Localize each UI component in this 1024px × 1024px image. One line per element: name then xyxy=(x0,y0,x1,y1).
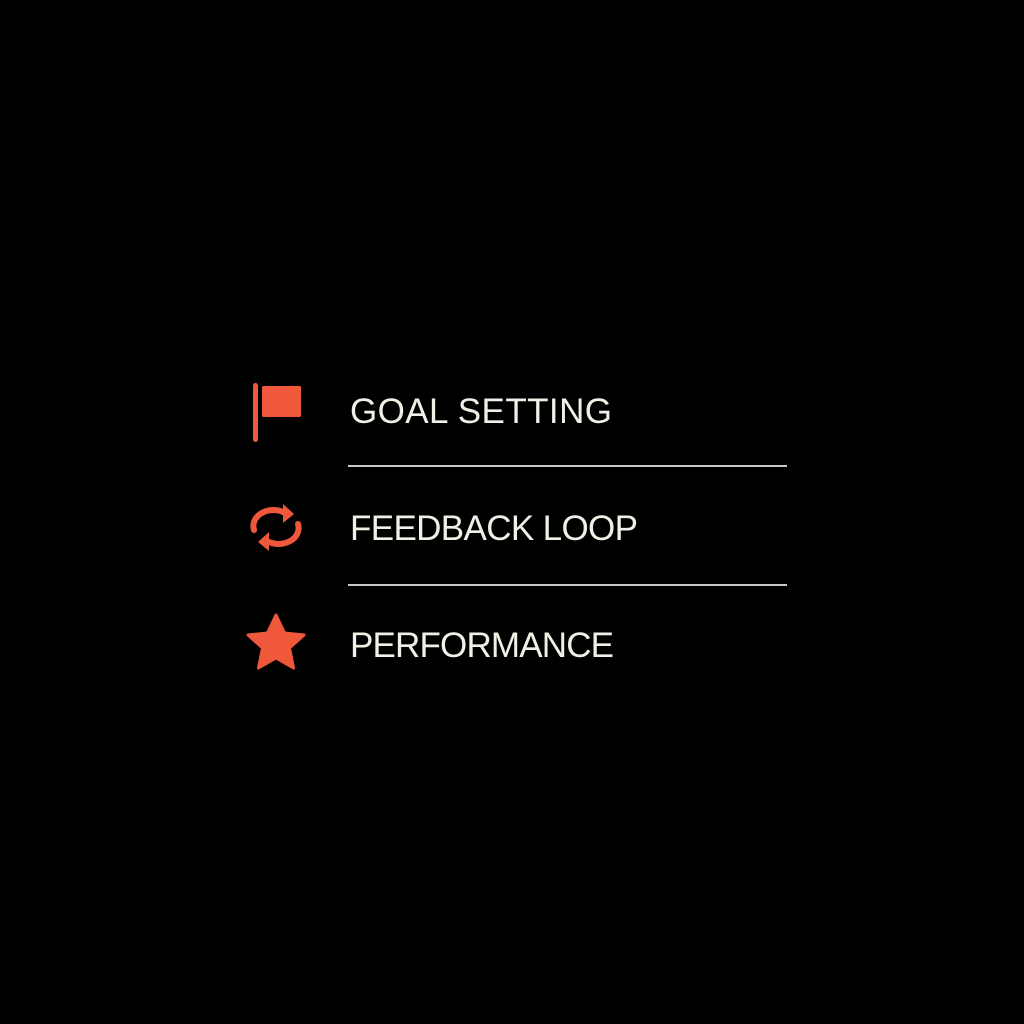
icon: star xyxy=(248,615,304,668)
label: performance: PERFORMANCE xyxy=(350,626,614,665)
icon: refresh loop xyxy=(253,504,299,551)
icon: flag xyxy=(253,383,301,442)
label: goal setting: GOAL SETTING xyxy=(350,392,612,431)
label: feedback loop: FEEDBACK LOOP xyxy=(350,509,638,548)
